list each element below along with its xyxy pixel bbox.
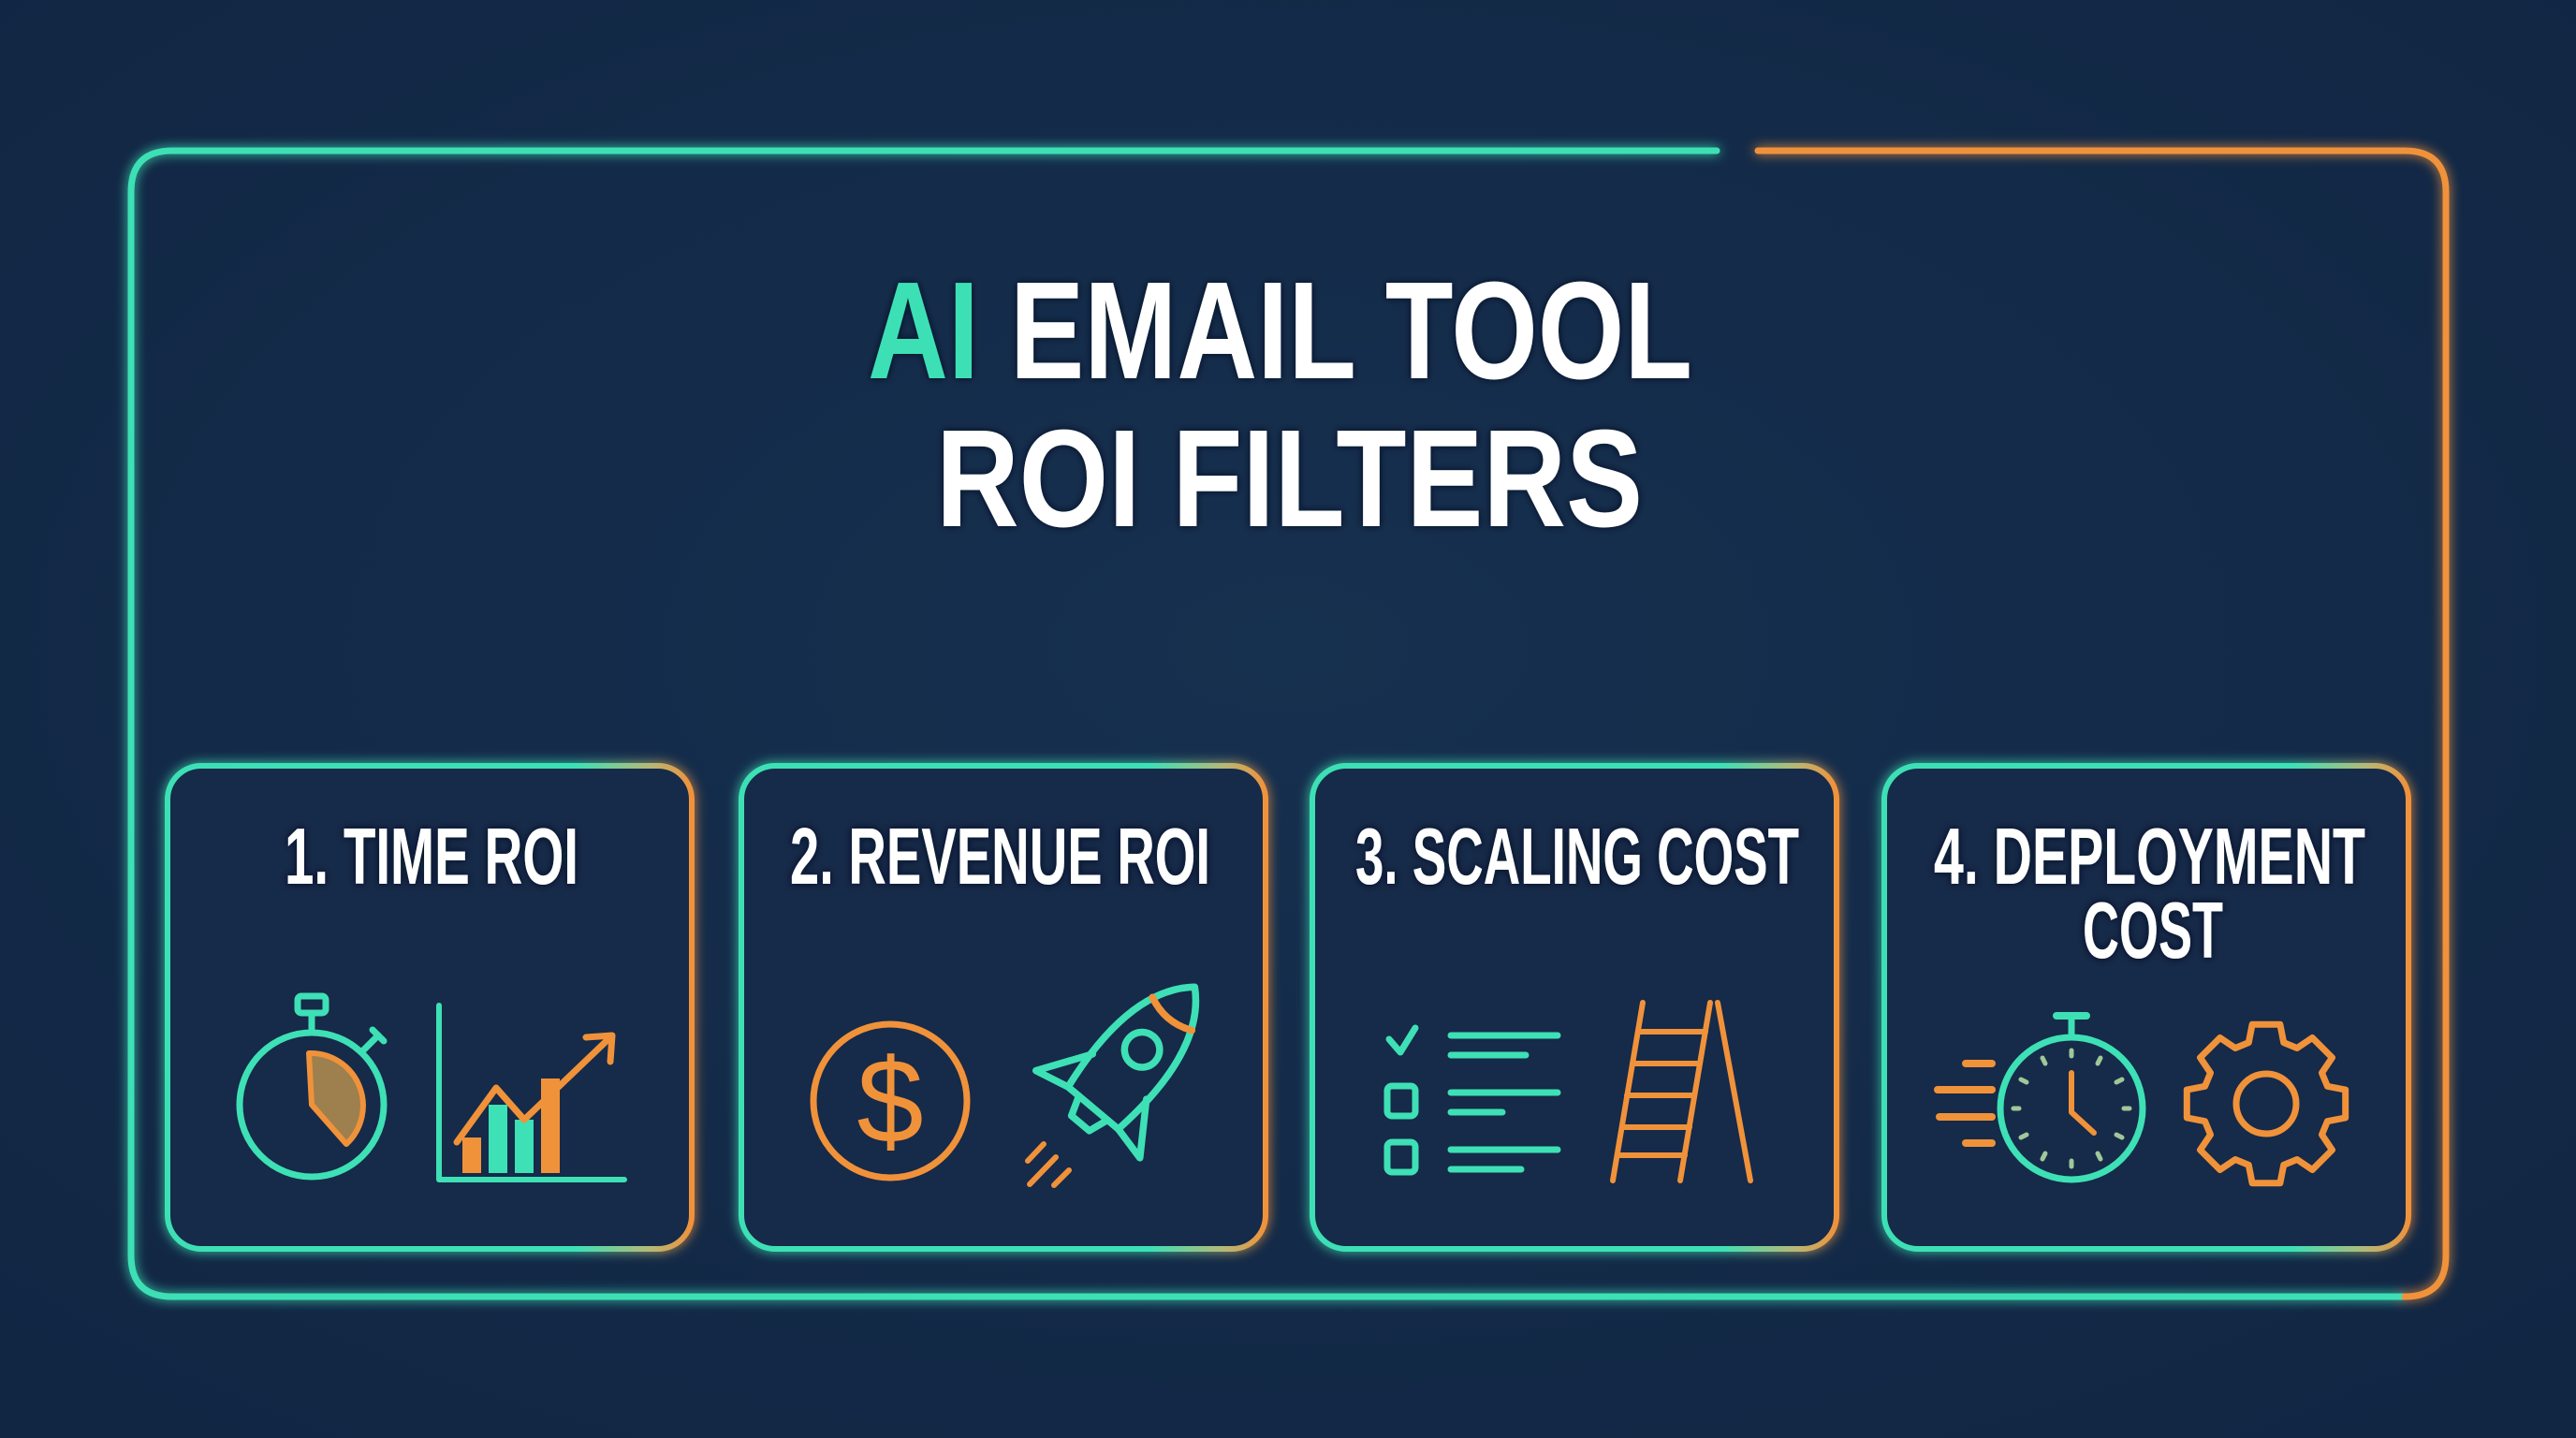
outer frame <box>131 151 2446 1297</box>
icon: dollar coin <box>813 1024 967 1178</box>
heading: revenue roi: 2. REVENUE ROI <box>790 813 1210 902</box>
panel: 3. Scaling Cost <box>1312 766 1837 1249</box>
title: AI EMAIL TOOL <box>868 254 1692 408</box>
title: ROI FILTERS <box>936 402 1643 556</box>
icon: stopwatch <box>240 996 384 1177</box>
heading: deployment cost: 4. DEPLOYMENT <box>1934 813 2365 902</box>
icon: dollar coin: $ <box>856 1034 924 1168</box>
icon: checklist <box>1387 1028 1558 1172</box>
heading: scaling cost: 3. SCALING COST <box>1355 813 1799 902</box>
panel: 4. Deployment Cost <box>1884 766 2408 1249</box>
icon: fast stopwatch <box>1938 1016 2143 1180</box>
heading: deployment cost <box>1934 813 2365 976</box>
heading: time roi: 1. TIME ROI <box>285 813 578 902</box>
heading: deployment cost: COST <box>2083 887 2223 976</box>
panel: 2. Revenue ROI <box>741 766 1266 1249</box>
panel: 1. Time ROI <box>168 766 692 1249</box>
title <box>868 254 1692 556</box>
icon: rocket <box>1028 944 1247 1185</box>
icon: growth chart <box>439 1005 624 1180</box>
icon: ladder <box>1613 1003 1750 1181</box>
icon: gear <box>2187 1024 2346 1183</box>
